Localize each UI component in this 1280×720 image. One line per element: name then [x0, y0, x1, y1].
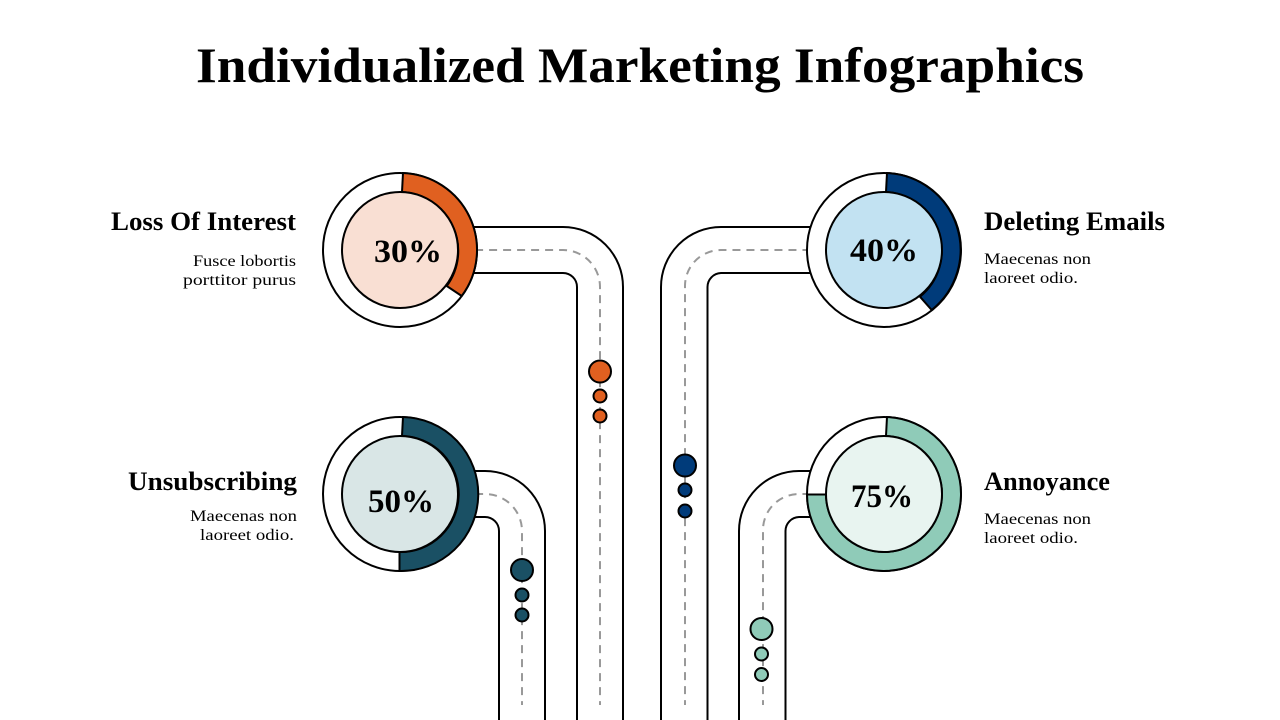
heading: Deleting Emails — [984, 207, 1165, 236]
value: 75% — [851, 479, 913, 515]
description — [190, 508, 297, 544]
road: loss of interest — [460, 227, 623, 720]
text block: deleting emails — [984, 207, 1165, 287]
description — [183, 253, 296, 289]
description — [984, 251, 1091, 287]
road markers: orange — [589, 360, 611, 422]
description: laoreet odio. — [200, 527, 294, 544]
heading: Loss Of Interest — [111, 207, 296, 236]
heading: Unsubscribing — [128, 467, 297, 496]
text block: loss of interest — [111, 207, 296, 289]
road: annoyance — [739, 471, 824, 720]
road markers: teal — [511, 559, 533, 622]
donut: 30% — [323, 173, 477, 327]
description — [984, 511, 1091, 547]
donut: 40% — [807, 173, 961, 327]
description: laoreet odio. — [984, 530, 1078, 547]
description: Fusce lobortis — [193, 253, 296, 270]
text block: unsubscribing — [128, 467, 297, 544]
donut: 50% — [323, 417, 478, 571]
road: unsubscribing — [460, 471, 545, 720]
heading: Annoyance — [984, 467, 1110, 496]
road markers: mint — [750, 618, 772, 681]
donut: 75% — [807, 417, 961, 571]
road markers: navy — [674, 454, 696, 518]
description: porttitor purus — [183, 272, 296, 289]
description: Maecenas non — [190, 508, 297, 525]
description: Maecenas non — [984, 511, 1091, 528]
text block: annoyance — [984, 467, 1110, 547]
description: laoreet odio. — [984, 270, 1078, 287]
value: 30% — [374, 234, 442, 270]
value: 40% — [850, 233, 918, 269]
road: deleting emails — [661, 227, 824, 720]
description: Maecenas non — [984, 251, 1091, 268]
value: 50% — [368, 484, 434, 520]
title: Individualized Marketing Infographics — [196, 37, 1084, 93]
